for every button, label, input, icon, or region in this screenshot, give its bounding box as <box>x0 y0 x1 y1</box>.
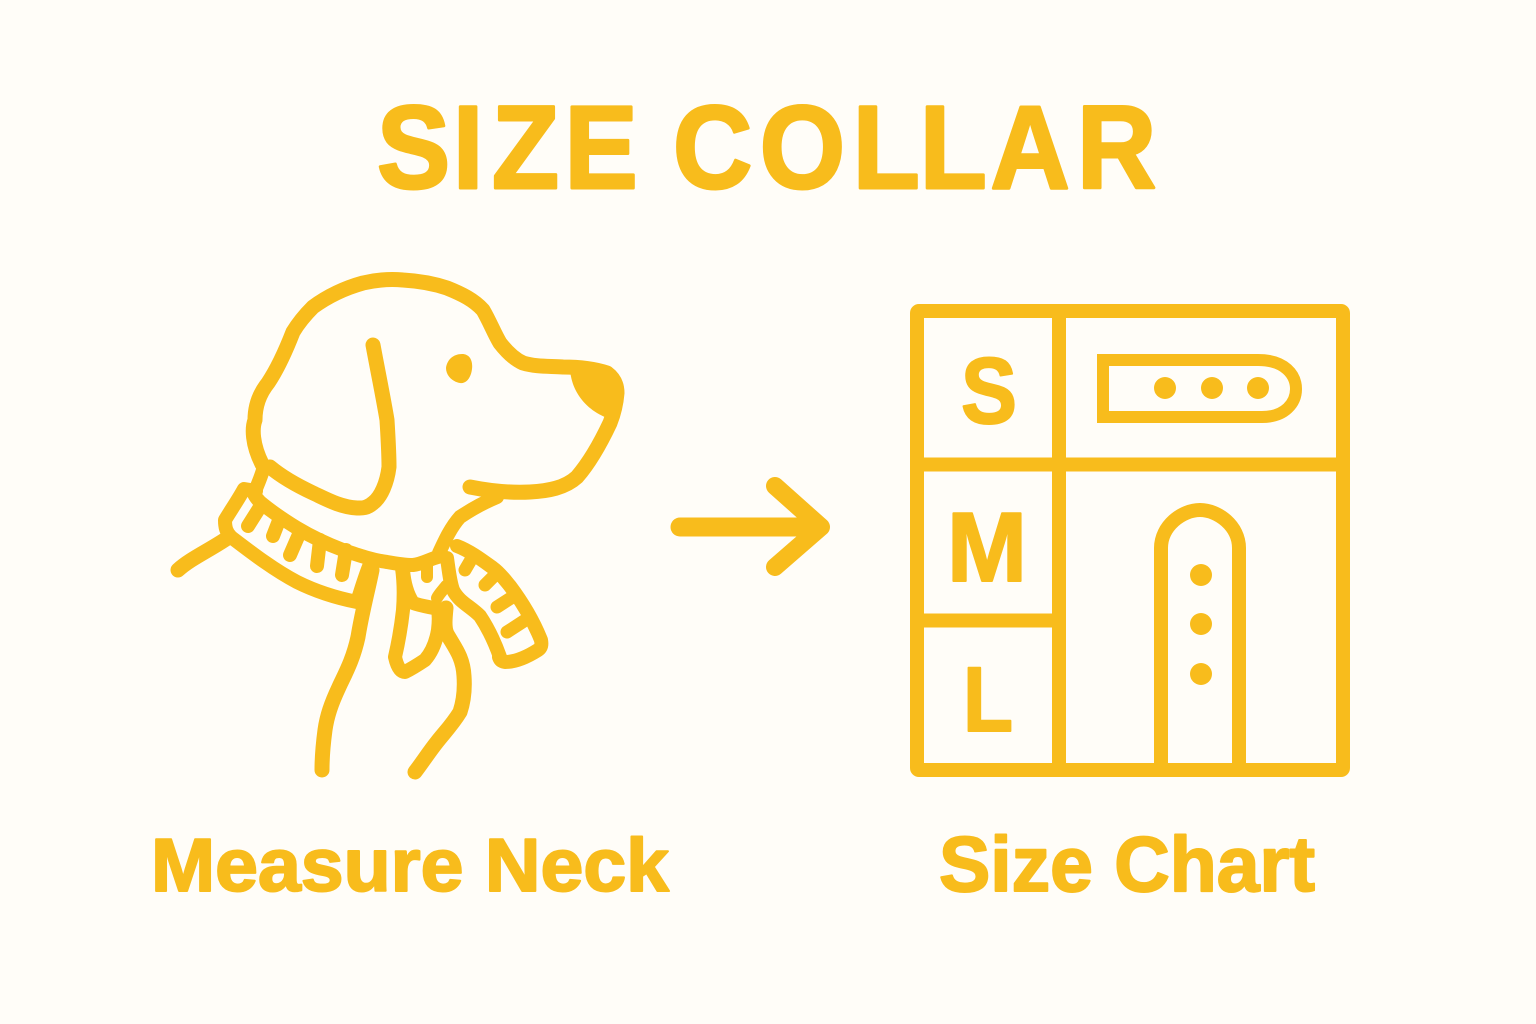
collar knot loop <box>395 568 439 672</box>
arrow <box>680 486 821 567</box>
arrow shaft <box>680 518 815 536</box>
right hanging strand <box>415 608 464 772</box>
size letter L: L <box>963 649 1013 751</box>
dog nose <box>570 368 622 420</box>
collar strap <box>1103 360 1296 417</box>
icon: vertical collar <box>1161 510 1239 764</box>
collar knot tag <box>427 566 446 598</box>
chart grid lines <box>924 318 1337 764</box>
tape right inner edge <box>447 558 500 657</box>
tape right ticks <box>465 558 527 632</box>
dog head outline <box>253 279 617 492</box>
size letter M: M <box>947 492 1027 602</box>
tape upper edge <box>254 470 438 565</box>
dog eye <box>446 354 472 383</box>
tape right outer edge <box>457 546 541 662</box>
tape lower edge and end <box>225 489 370 602</box>
collar holes <box>1154 377 1269 399</box>
collar holes <box>1190 564 1212 685</box>
tape tail <box>178 539 226 570</box>
label: measure neck: Measure Neck <box>151 823 669 907</box>
chest line <box>322 570 372 770</box>
measuring tape left band <box>178 470 438 602</box>
icon: dog with measuring tape around neck <box>178 279 622 772</box>
measuring tape right band <box>447 546 541 662</box>
collar strap <box>1161 510 1239 764</box>
title: SIZE COLLAR <box>377 82 1156 214</box>
panel: size chart <box>917 311 1343 770</box>
dog neck front <box>439 497 497 553</box>
chart frame <box>917 311 1343 770</box>
arrow head <box>775 486 821 567</box>
tape ticks left <box>248 507 346 575</box>
size letter S: S <box>961 338 1017 443</box>
icon: horizontal collar <box>1103 360 1296 417</box>
label: size chart: Size Chart <box>939 820 1315 908</box>
dog ear <box>270 345 389 508</box>
